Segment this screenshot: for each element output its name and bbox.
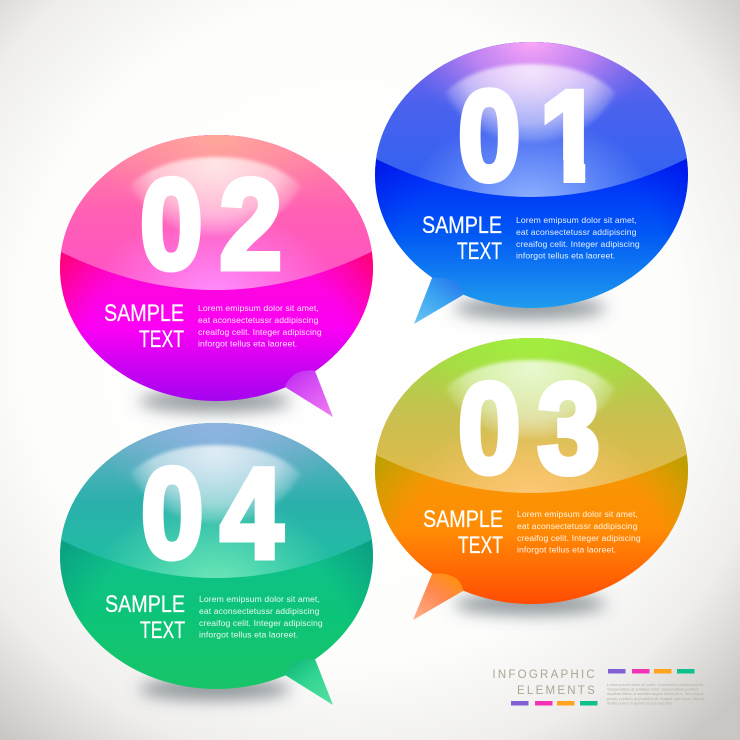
bubble 02 shadow [139, 390, 291, 412]
number 01: 01 [458, 64, 602, 208]
heading: sample text: TEXT [457, 238, 502, 265]
bubble 03 body [370, 326, 692, 604]
panel: bubble 04 [55, 411, 377, 705]
bubble 04 pointer [285, 658, 333, 705]
number 02: 02 [140, 153, 282, 296]
bubble 03 shadow [454, 593, 606, 615]
body text: eat aconsectetussr addipiscing [516, 227, 637, 237]
heading: sample text [104, 300, 184, 353]
panel: bubble 01 [370, 30, 692, 324]
body text: eat aconsectetussr addipiscing [199, 606, 320, 616]
body text: creaifog celit. Integer adipiscing [517, 533, 641, 543]
footer small text: Lorem ipsum dolor sit amet, consectetur adipiscing elit. [607, 682, 704, 687]
bubble 02 pointer [285, 370, 333, 417]
body text: Lorem emipsum dolor sit amet, [199, 594, 320, 604]
heading: sample text: SAMPLE [422, 212, 502, 239]
bubble 01 shadow [454, 297, 606, 319]
heading: sample text: SAMPLE [105, 591, 185, 618]
panel: infographic elements footer [492, 669, 705, 706]
panel: bubble 03 [370, 326, 692, 620]
bubble 02 body [55, 123, 377, 401]
bubble 03 pointer [413, 574, 463, 620]
heading: sample text: SAMPLE [104, 300, 184, 327]
heading: sample text: TEXT [139, 326, 184, 353]
bubble 04 shadow [139, 678, 291, 700]
heading: sample text [423, 506, 503, 559]
bubble 01 pointer [414, 278, 463, 324]
footer small text: dapibus tellus, a sodales augue tincidunt a. Sed augue [607, 691, 705, 696]
top colour bars [608, 669, 694, 674]
body text: inforgot tellus eta laoreet. [198, 338, 297, 348]
body text: Lorem emipsum dolor sit amet, [517, 509, 638, 519]
body text: Lorem emipsum dolor sit amet, [516, 215, 637, 225]
footer title: INFOGRAPHIC [492, 669, 597, 681]
heading: sample text: TEXT [140, 617, 185, 644]
footer small text: Suspendisse at sodales dolor. Suspendisse porttitor [607, 687, 700, 692]
bubble 04 body [55, 411, 377, 689]
number 03: 03 [458, 357, 600, 500]
body text: eat aconsectetussr addipiscing [517, 521, 638, 531]
body text: creaifog celit. Integer adipiscing [198, 327, 322, 337]
footer small text: mollis purus ut quam cursus egestas. [607, 700, 673, 705]
heading: sample text: TEXT [458, 532, 503, 559]
body text: Lorem emipsum dolor sit amet, [198, 303, 319, 313]
footer small text: purus, pretium at pharetra sit, feugiat quis risus. Mauris [607, 696, 705, 701]
footer title: ELEMENTS [517, 685, 597, 697]
heading: sample text [105, 591, 185, 644]
heading: sample text [422, 212, 502, 265]
body text: inforgot tellus eta laoreet. [516, 250, 615, 260]
body text: inforgot tellus eta laoreet. [199, 630, 298, 640]
heading: sample text: SAMPLE [423, 506, 503, 533]
body text: creaifog celit. Integer adipiscing [516, 239, 640, 249]
bubble 01 body [370, 30, 692, 308]
panel: bubble 02 [55, 123, 377, 417]
number 04: 04 [141, 442, 283, 585]
body text: eat aconsectetussr addipiscing [198, 315, 319, 325]
body text: creaifog celit. Integer adipiscing [199, 618, 323, 628]
body text: inforgot tellus eta laoreet. [517, 544, 616, 554]
bottom colour bars [511, 701, 598, 706]
